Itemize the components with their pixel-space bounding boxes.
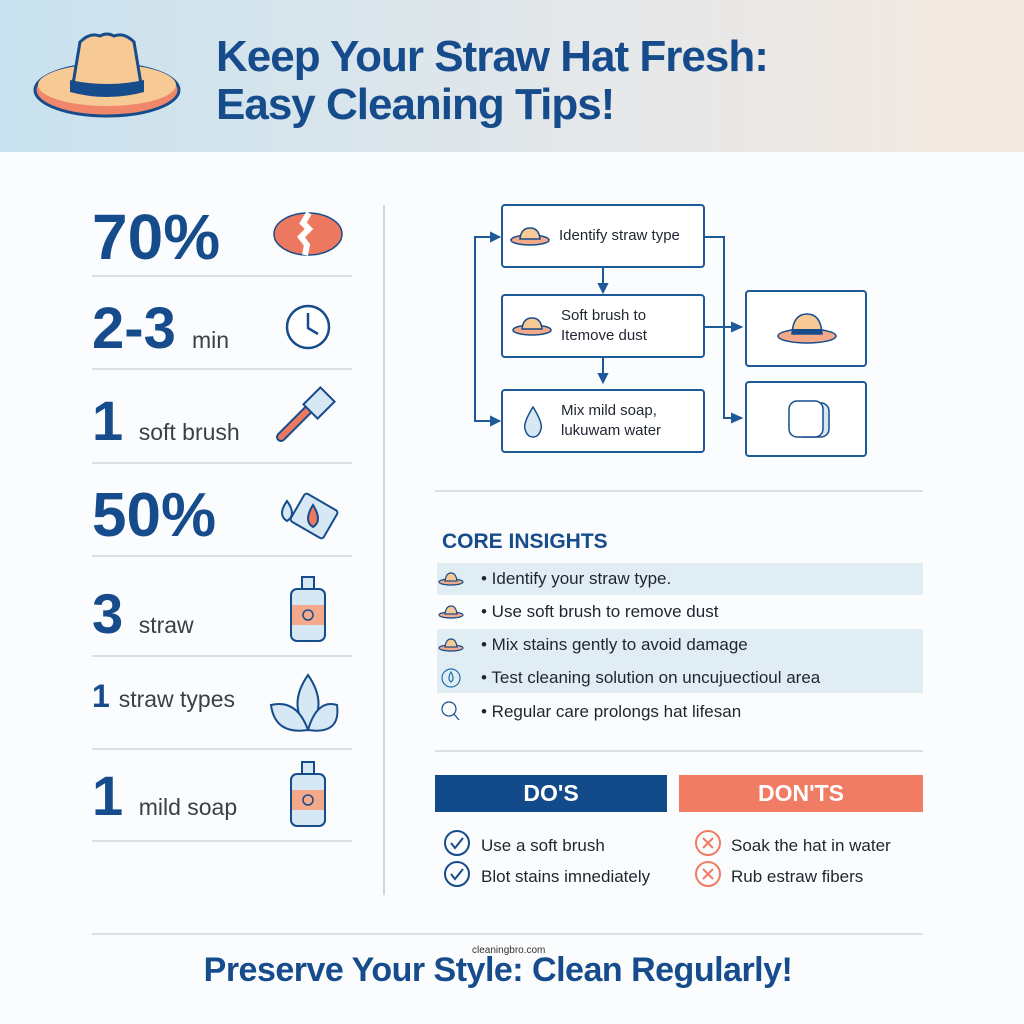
insights list: • Use soft brush to remove dust xyxy=(481,602,718,621)
panel: do's: Blot stains imnediately xyxy=(481,867,650,886)
step: soft brush: Itemove dust xyxy=(561,327,647,344)
insights list: • Identify your straw type. xyxy=(481,569,671,588)
step: mix soap: Mix mild soap, xyxy=(561,402,657,419)
icon: drops & cloth xyxy=(282,493,338,539)
connectors xyxy=(474,231,744,427)
stat 70%: 70% xyxy=(92,201,220,273)
panel: do's: Use a soft brush xyxy=(481,836,605,855)
icon: soap bottle xyxy=(291,577,325,641)
result: cloth xyxy=(745,381,867,457)
step: soft brush: Soft brush to xyxy=(561,307,646,324)
insights list: • Regular care prolongs hat lifesan xyxy=(481,702,741,721)
header banner xyxy=(0,0,1024,152)
icon: straw hat xyxy=(34,32,180,118)
icon: broken oval xyxy=(274,213,342,255)
stat 50%: 50% xyxy=(92,481,216,550)
title: Keep Your Straw Hat Fresh: xyxy=(216,32,768,81)
flowchart xyxy=(474,204,867,457)
panel: don'ts: Soak the hat in water xyxy=(731,836,891,855)
stat 1 straw types: 1 straw types xyxy=(92,678,235,714)
icons column xyxy=(270,212,343,827)
stat 3 straw: 3 straw xyxy=(92,582,194,645)
panel: don'ts: DON'TS xyxy=(758,780,844,806)
source text: cleaningbro.com xyxy=(472,945,545,956)
footer tagline: Preserve Your Style: Clean Regularly! xyxy=(204,951,792,989)
step: soft brush xyxy=(501,294,705,358)
insights list xyxy=(437,563,923,721)
stat 1 soft brush: 1 soft brush xyxy=(92,389,240,452)
panel: don'ts xyxy=(679,775,923,887)
panel: don'ts: Rub estraw fibers xyxy=(731,867,863,886)
step: identify straw type xyxy=(501,204,705,268)
panel: do's xyxy=(435,775,667,887)
step: identify straw type: Identify straw type xyxy=(559,227,680,244)
step: mix soap: lukuwam water xyxy=(561,422,661,439)
insights list: • Mix stains gently to avoid damage xyxy=(481,635,748,654)
stat 1 mild soap: 1 mild soap xyxy=(92,764,237,827)
icon: leaves xyxy=(271,675,337,731)
title: Easy Cleaning Tips! xyxy=(216,80,614,129)
icon: brush xyxy=(281,387,335,437)
result: hat xyxy=(745,290,867,367)
heading: core insights: CORE INSIGHTS xyxy=(442,530,608,553)
panel: do's: DO'S xyxy=(523,780,579,806)
insights list: • Test cleaning solution on uncujuectioul area xyxy=(481,668,820,687)
icon: clock xyxy=(287,306,329,348)
panel: stats xyxy=(92,201,240,827)
stat 2-3 min: 2-3 min xyxy=(92,296,229,361)
step: mix soap xyxy=(501,389,705,453)
icon: soap bottle 2 xyxy=(291,762,325,826)
title xyxy=(216,32,768,129)
